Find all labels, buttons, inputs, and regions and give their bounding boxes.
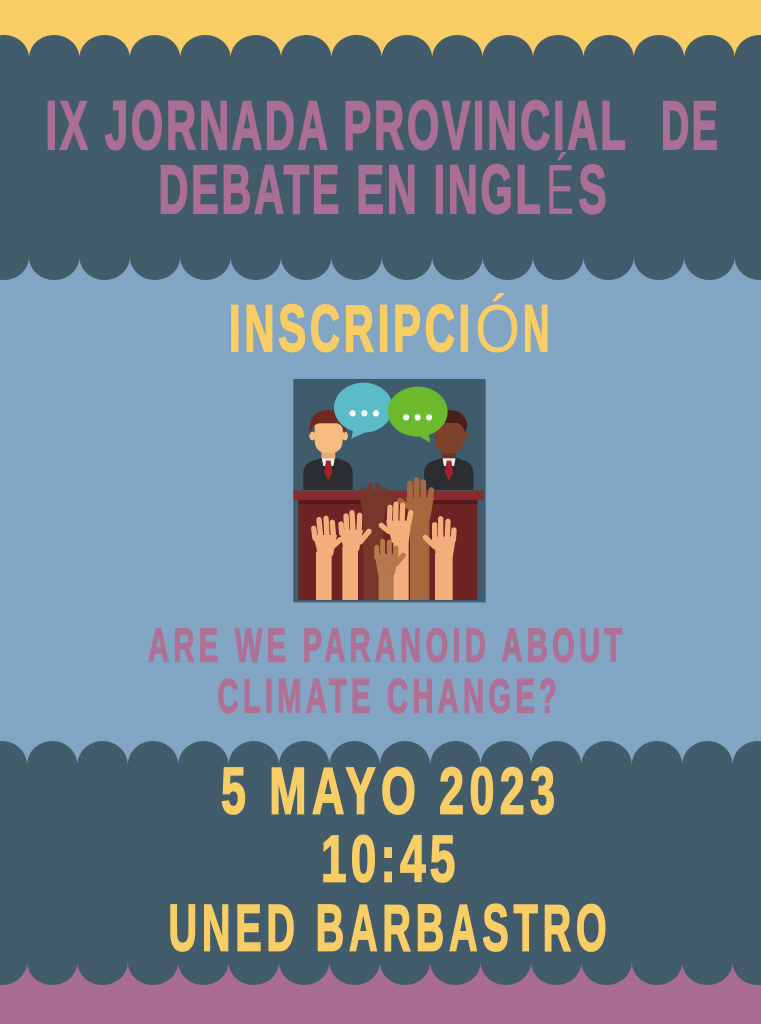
raised hand: dark brown: [360, 485, 393, 600]
title: [46, 87, 720, 230]
date: 5 MAYO 2023: [221, 754, 560, 827]
title: É: [546, 151, 574, 230]
heading: inscripción: N: [523, 292, 550, 365]
speaker right: [424, 410, 473, 490]
time: 10:45: [321, 822, 460, 895]
raised hand: medium brown: [375, 541, 403, 600]
raised hand: light far left: [313, 518, 340, 600]
raised hand: light right: [425, 519, 456, 600]
speech bubble blue: [334, 383, 393, 439]
illustration background: [293, 379, 486, 602]
title: S: [578, 151, 606, 228]
speaker left: [303, 410, 353, 490]
bottom mauve band: [0, 950, 761, 1024]
raised hand: light centre: [381, 504, 411, 600]
speech bubble green: [388, 387, 448, 443]
podium: [293, 491, 483, 600]
heading: inscripción: INSCRIPCI: [229, 292, 474, 365]
raised hand: tan tall: [400, 480, 434, 600]
raised hand: light left: [340, 513, 369, 600]
illustration: debate with raised hands: [293, 379, 486, 602]
top yellow band: [0, 0, 761, 70]
top dark scalloped panel: [0, 35, 761, 280]
bottom dark scalloped panel: [0, 741, 761, 985]
heading: inscripción: Ó: [475, 291, 520, 367]
question text: [148, 619, 626, 723]
